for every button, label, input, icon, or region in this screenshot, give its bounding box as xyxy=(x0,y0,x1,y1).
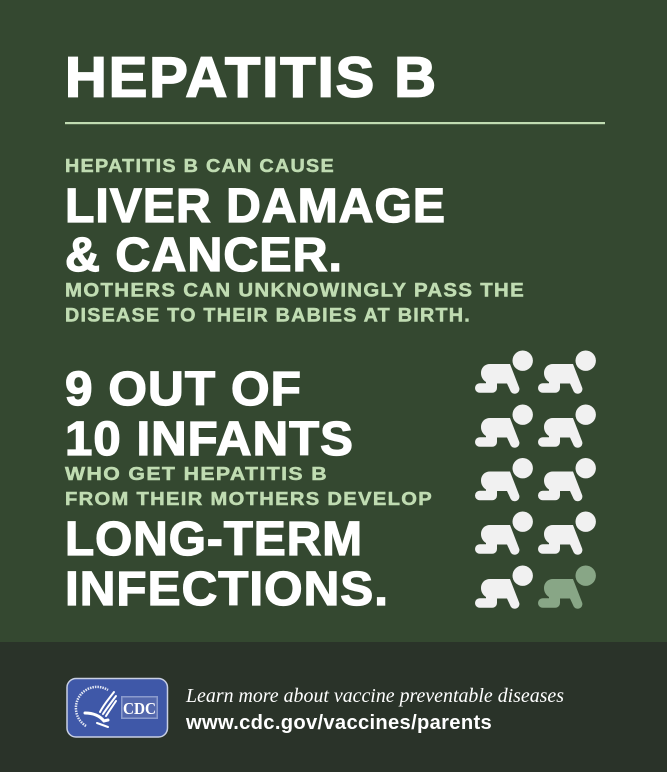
text block: liver damage: LIVER DAMAGE xyxy=(65,180,446,233)
footer band xyxy=(0,642,667,772)
HHS eagle mark xyxy=(85,692,116,727)
text block: liver damage: DISEASE TO THEIR BABIES AT BIRTH. xyxy=(65,306,471,326)
footer text xyxy=(185,686,564,734)
text block: infant statistic: FROM THEIR MOTHERS DEVELOP xyxy=(65,488,433,509)
text block: infant statistic: 9 OUT OF xyxy=(65,363,302,416)
text block: liver damage xyxy=(65,155,525,326)
footer text: Learn more about vaccine preventable diseases xyxy=(185,686,564,707)
text block: infant statistic: LONG-TERM xyxy=(65,513,363,566)
HHS seal ring xyxy=(76,687,108,726)
text block: infant statistic xyxy=(65,363,433,616)
CDC logo xyxy=(67,678,168,737)
text block: liver damage: & CANCER. xyxy=(65,229,343,282)
text block: infant statistic: INFECTIONS. xyxy=(65,563,389,616)
text block: liver damage: HEPATITIS B CAN CAUSE xyxy=(65,155,335,176)
text block: infant statistic: WHO GET HEPATITIS B xyxy=(65,463,328,484)
text block: infant statistic: 10 INFANTS xyxy=(65,413,354,466)
footer text: www.cdc.gov/vaccines/parents xyxy=(185,712,492,734)
CDC wordmark box: CDC xyxy=(123,699,156,718)
title: HEPATITIS B xyxy=(65,46,438,110)
pictogram: 9 of 10 infants xyxy=(475,350,596,609)
text block: liver damage: MOTHERS CAN UNKNOWINGLY PASS THE xyxy=(65,280,525,302)
